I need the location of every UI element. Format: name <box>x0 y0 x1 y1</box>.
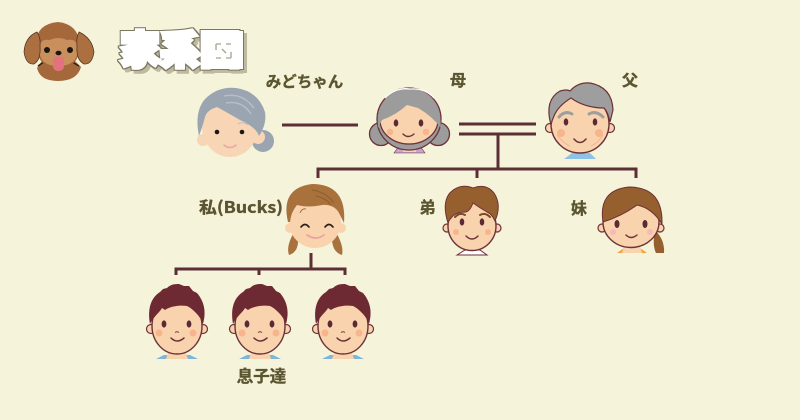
icon: son 3 <box>312 284 374 359</box>
label: sons: 息子達 <box>237 363 287 387</box>
icon: son 1 <box>146 284 208 359</box>
icon: younger sister <box>598 187 664 253</box>
icon: younger brother <box>443 186 501 255</box>
icon: father <box>546 83 614 159</box>
icon: grandmother Midori <box>197 88 274 157</box>
connector: me to sons <box>176 253 345 275</box>
connector: marriage double line <box>459 124 536 134</box>
icon: dog mascot <box>24 22 94 81</box>
connector: Midori to mother <box>282 124 358 126</box>
connector: parents to children <box>318 134 636 178</box>
icon: mother <box>370 88 450 153</box>
label: Midori: みどちゃん <box>266 70 343 92</box>
icon: me <box>285 184 346 255</box>
label: younger sister: 妹 <box>571 195 587 219</box>
label: mother: 母 <box>450 67 466 91</box>
label: younger brother: 弟 <box>419 194 436 218</box>
label: father: 父 <box>622 67 638 91</box>
icon: son 2 <box>230 284 290 359</box>
title: 家系図 <box>120 20 240 76</box>
label: me: 私(Bucks) <box>199 194 283 218</box>
